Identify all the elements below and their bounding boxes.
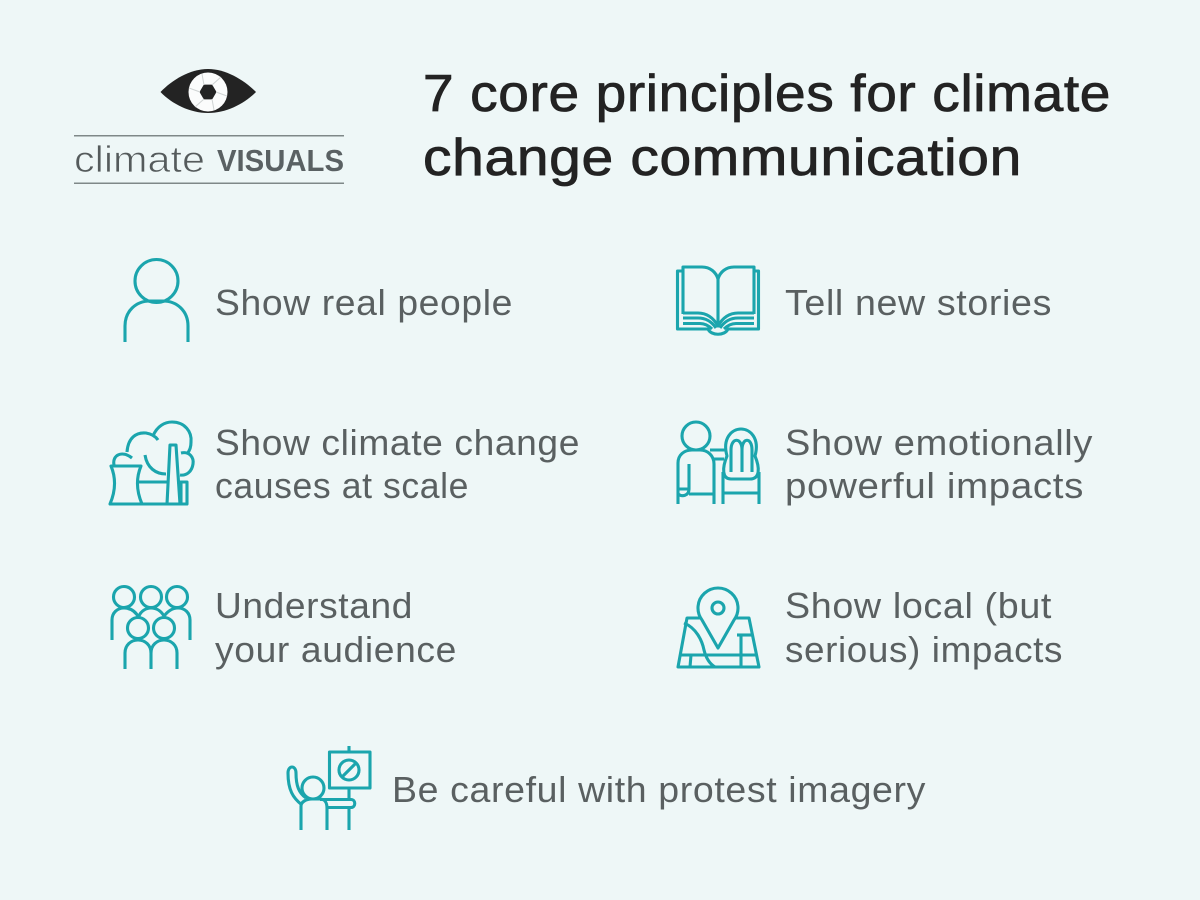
principle: tell new stories <box>678 267 1052 334</box>
title: change communication <box>423 129 1022 187</box>
logo wordmark bold: VISUALS <box>217 143 344 178</box>
label: Show real people <box>215 282 513 323</box>
label: Show local (but <box>785 585 1052 626</box>
principle: show local but serious impacts <box>678 585 1063 670</box>
icon: person comforting another <box>678 422 759 504</box>
label: Tell new stories <box>785 282 1052 323</box>
principle: be careful with protest imagery <box>288 746 926 830</box>
label: Show climate change <box>215 422 580 463</box>
icon: open book <box>678 267 758 334</box>
icon: person <box>125 260 188 342</box>
label line two: your audience <box>215 629 457 670</box>
icon: eye <box>160 69 256 113</box>
label: Show emotionally <box>785 422 1093 463</box>
icon: group of people <box>112 586 190 669</box>
label line two: powerful impacts <box>785 465 1084 506</box>
title <box>423 65 1111 187</box>
logo wordmark: climate <box>74 139 205 180</box>
label line two: causes at scale <box>215 465 469 506</box>
principle: show real people <box>125 260 513 342</box>
label: Understand <box>215 585 413 626</box>
logo: Climate Visuals <box>74 69 344 184</box>
icon: protester with sign <box>288 746 370 830</box>
principle: show climate change causes at scale <box>110 422 580 506</box>
title: 7 core principles for climate <box>423 65 1111 123</box>
principle: understand your audience <box>112 585 457 670</box>
icon: factory and smoke <box>110 422 193 504</box>
label: Be careful with protest imagery <box>392 769 926 810</box>
icon: map with pin <box>678 588 759 667</box>
principle: show emotionally powerful impacts <box>678 422 1093 506</box>
label line two: serious) impacts <box>785 629 1063 670</box>
